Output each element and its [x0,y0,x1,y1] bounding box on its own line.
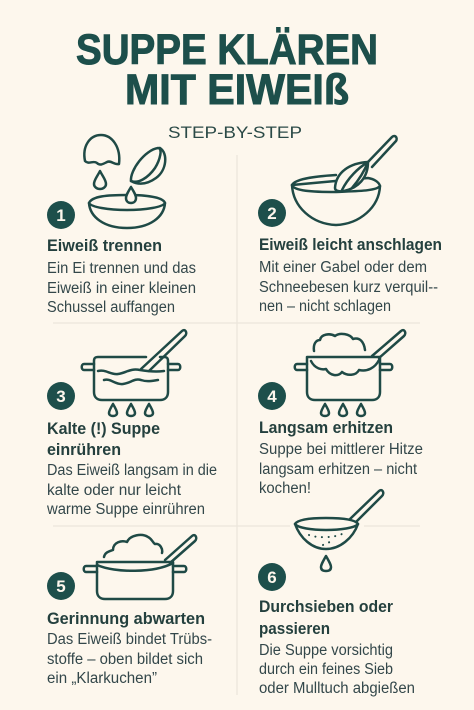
number badge 5: 5 [56,577,66,596]
heading 4: Langsam erhitzen [259,418,393,437]
number badge 4: 4 [267,387,277,406]
body 1: Ein Ei trennen und das [47,260,196,277]
number badge 6: 6 [267,568,277,587]
body 6 [259,642,415,697]
step 4 [258,330,423,497]
step 6 [258,490,415,697]
number badge 3 [47,382,75,410]
title [76,26,378,114]
body 5 [47,631,212,687]
body 3: kalte oder nur leicht [47,482,182,499]
body 3 [46,462,217,518]
body 2: Mit einer Gabel oder dem [259,259,427,276]
subtitle: STEP-BY-STEP [168,123,302,142]
step 3 [46,330,217,518]
number badge 4 [258,382,286,410]
body 3: Das Eiweiß langsam in die [47,462,217,479]
body 2: nen – nicht schlagen [259,298,391,315]
heading 1: Eiweiß trennen [47,236,162,255]
icon: pot with foam on low heat [295,330,405,416]
icon: egg separating into bowl [84,135,165,228]
number badge 1 [47,201,75,229]
body 6: oder Mulltuch abgießen [259,680,415,697]
body 2: Schneebesen kurz verquil-- [259,279,438,296]
number badge 1: 1 [56,206,66,225]
heading 3: einrühren [47,440,121,459]
number badge 5 [47,572,75,600]
body 1: Schussel auffangen [47,299,175,316]
heading 3: Kalte (!) Suppe [47,419,160,438]
heading 3 [47,419,160,459]
body 5: ein „Klarkuchen” [47,670,157,687]
heading 6: passieren [259,619,330,638]
title: MIT EIWEIß [125,66,349,114]
heading 6: Durchsieben oder [259,597,393,616]
body 6: Die Suppe vorsichtig [259,642,393,659]
number badge 2 [258,199,286,227]
heading 6 [259,597,393,638]
body 4: langsam erhitzen – nicht [259,461,418,478]
body 2 [259,259,438,315]
icon: bowl with whisk [292,136,397,225]
number badge 3: 3 [56,387,66,406]
icon: pot with cold soup and spoon [82,330,186,416]
body 5: Das Eiweiß bindet Trübs- [47,631,212,648]
heading 2: Eiweiß leicht anschlagen [259,235,442,254]
number badge 6 [258,563,286,591]
body 1 [47,260,196,316]
title: SUPPE KLÄREN [76,26,378,74]
body 4: kochen! [259,480,311,497]
icon: pot with clarifying raft [84,535,196,599]
body 1: Eiweiß in einer kleinen [47,280,196,297]
step 1 [47,135,196,316]
number badge 2: 2 [267,204,277,223]
icon: sieve with drop [295,490,383,571]
body 6: durch ein feines Sieb [259,661,393,678]
body 4: Suppe bei mittlerer Hitze [259,441,423,458]
step 5 [47,535,212,687]
body 5: stoffe – oben bildet sich [47,651,203,668]
heading 5: Gerinnung abwarten [47,609,205,628]
body 3: warme Suppe einrühren [46,501,205,518]
step 2 [258,136,442,315]
body 4 [259,441,423,497]
